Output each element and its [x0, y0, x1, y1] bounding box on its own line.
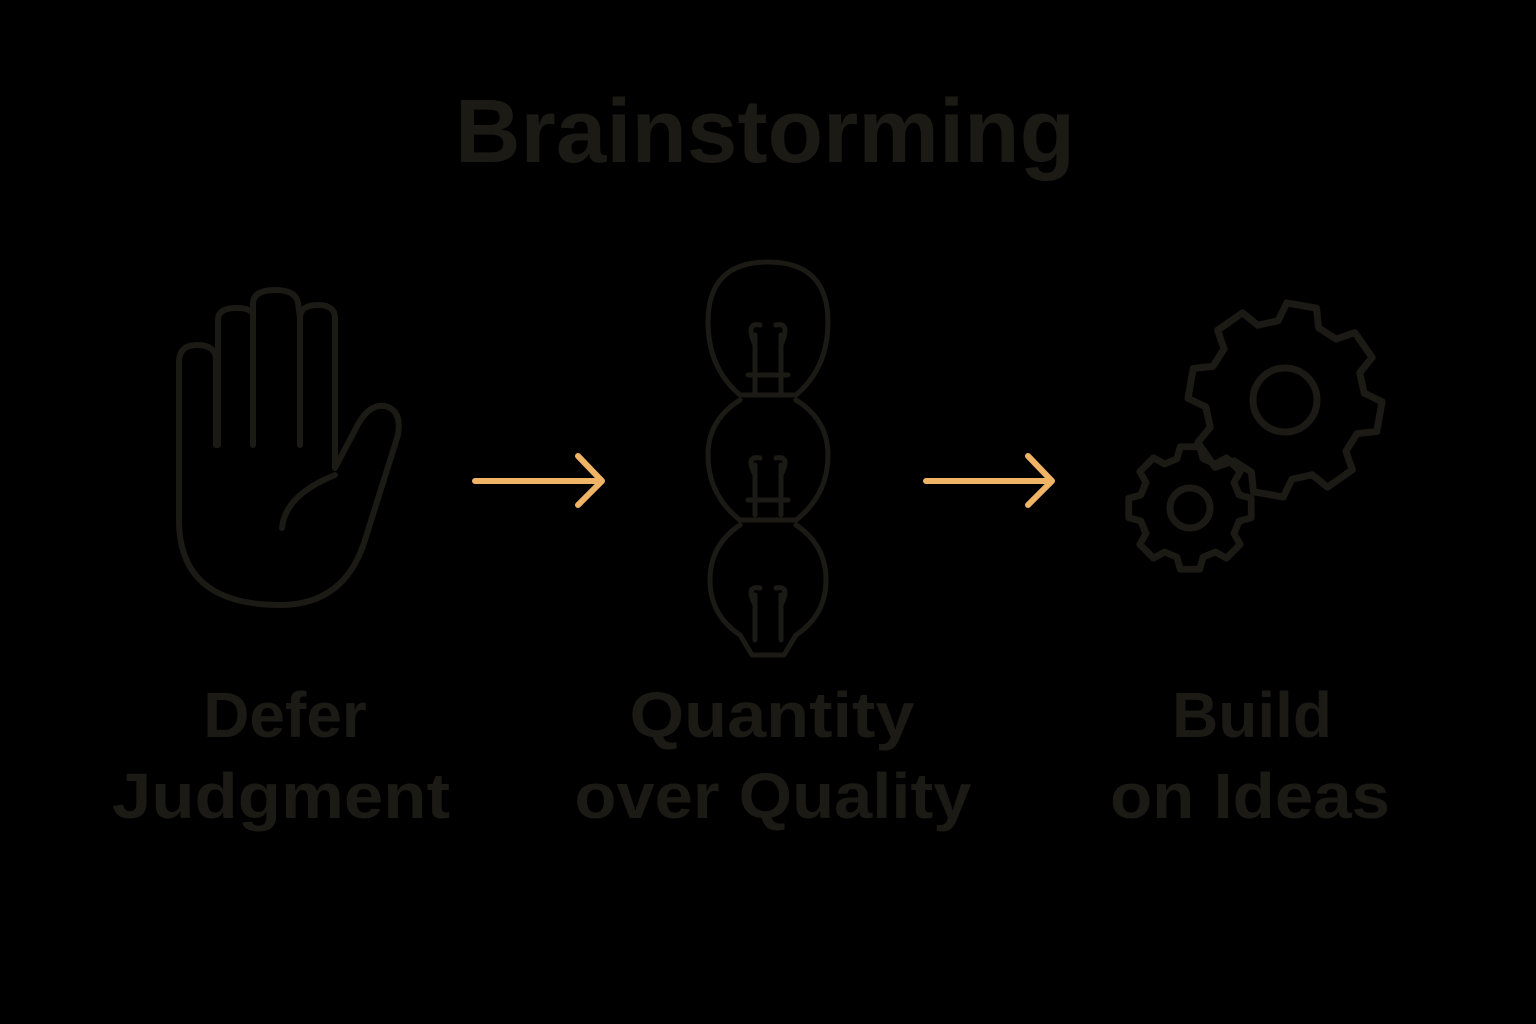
label: defer judgment: Defer	[203, 679, 367, 751]
label: quantity over quality: Quantity	[630, 679, 915, 751]
arrow 2	[926, 456, 1052, 505]
label: build on ideas	[1110, 679, 1390, 832]
icon: gears	[1129, 289, 1396, 569]
label: build on ideas: Build	[1172, 679, 1332, 751]
title: Brainstorming	[455, 82, 1075, 182]
icon: hand	[179, 290, 399, 605]
label: defer judgment	[112, 679, 450, 832]
label: quantity over quality: over Quality	[574, 760, 972, 832]
arrow 1	[475, 456, 602, 505]
label: defer judgment: Judgment	[112, 760, 450, 832]
label: build on ideas: on Ideas	[1110, 760, 1390, 832]
icon: light bulbs	[708, 262, 828, 655]
label: quantity over quality	[574, 679, 972, 832]
